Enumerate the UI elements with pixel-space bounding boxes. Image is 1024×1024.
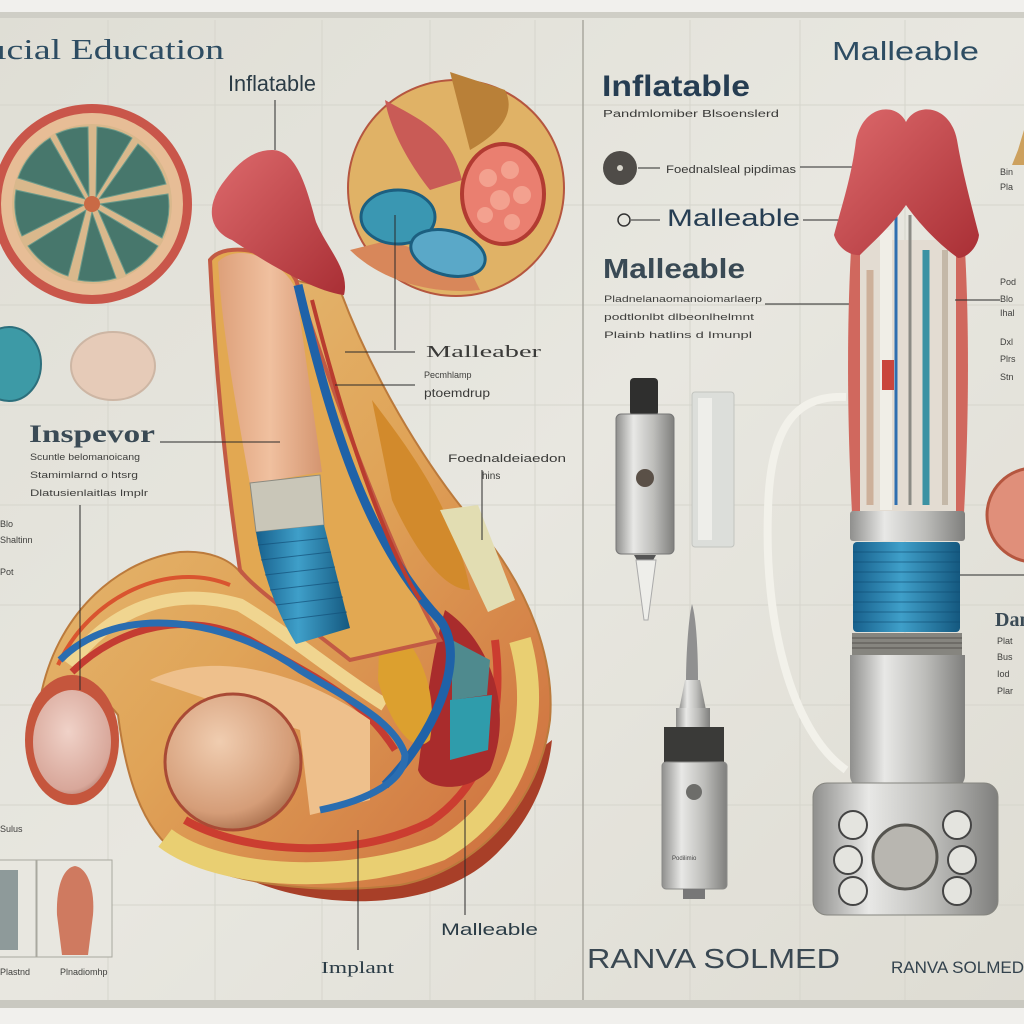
- blue vessels: [298, 285, 450, 785]
- callout: Inspevor: Inspevor: [29, 421, 155, 448]
- inner peach tissue: [150, 666, 370, 815]
- thumbnails: Sulus: [0, 824, 23, 834]
- right edge labels: Plat: [997, 636, 1013, 646]
- callout: Inspevor: Scuntle belomanoicang: [30, 452, 140, 462]
- title: ıcial Education: [0, 34, 225, 66]
- glans: [212, 150, 345, 295]
- callout: Inspevor: [29, 421, 280, 498]
- right edge labels: Bin: [1000, 167, 1013, 177]
- inset: anatomy circle: [348, 72, 564, 296]
- right edge labels: Iod: [997, 669, 1010, 679]
- label: Malleable bottom: Malleable: [441, 920, 538, 939]
- pointer lines: [80, 100, 465, 950]
- right edge labels: [955, 130, 1024, 696]
- thumbnails: Plnadiomhp: [60, 967, 108, 977]
- text block: Malleable: podtlonlbt dlbeonlhelmnt: [604, 312, 755, 322]
- right edge labels: Ihal: [1000, 308, 1015, 318]
- label: Implant: Implant: [321, 958, 394, 977]
- device: pen injector: [662, 604, 727, 899]
- label: Malleaber: [335, 342, 542, 400]
- callout: Foednaldeisedon: hins: [482, 471, 500, 482]
- right edge labels: Plrs: [1000, 354, 1016, 364]
- left capsule: [25, 675, 119, 805]
- icon: edge circle: [987, 468, 1024, 562]
- thumbnails: Plastnd: [0, 967, 30, 977]
- right edge labels: Pod: [1000, 277, 1016, 287]
- right edge labels: Dxl: [1000, 337, 1013, 347]
- implant coil: [256, 525, 350, 644]
- legend: Malleable: [618, 205, 860, 232]
- implant collar: [250, 475, 324, 532]
- icon: teal disc: [0, 327, 41, 401]
- gold structures: [378, 620, 432, 745]
- shaft: [210, 250, 440, 660]
- red tip: [834, 109, 979, 258]
- side label: left fragments: Pot: [0, 567, 14, 577]
- callout: Foednaldeisedon: Foednaldeiaedon: [448, 453, 566, 465]
- right edge labels: Pla: [1000, 182, 1013, 192]
- device: tube: [768, 397, 846, 770]
- red cavity: [418, 610, 500, 787]
- device: pen injector: Podilimio: [672, 856, 697, 862]
- text block: Malleable: Malleable: [603, 253, 745, 284]
- legend: Malleable: Malleable: [667, 205, 800, 232]
- lower body: [42, 262, 551, 889]
- device: implant: [834, 109, 979, 792]
- device: silver vial: [616, 378, 674, 620]
- device: clear sleeve: [692, 392, 734, 547]
- right edge labels: Plar: [997, 686, 1013, 696]
- collar: [850, 511, 965, 541]
- main capsule: [165, 694, 301, 830]
- anatomy illustration: [25, 150, 552, 901]
- outer bands: [58, 577, 230, 665]
- clear cylinder: [851, 240, 965, 512]
- legend: dark dot: [603, 151, 892, 185]
- label: Malleaber: Pecmhlamp: [424, 370, 472, 380]
- thumbnails: [0, 824, 112, 977]
- right edge labels: Stn: [1000, 372, 1014, 382]
- callout: Foednaldeisedon: [448, 453, 566, 540]
- legend: dark dot: Foednalsleal pipdimas: [666, 164, 797, 176]
- shadow under body: [250, 740, 552, 901]
- label: Malleaber: ptoemdrup: [424, 386, 490, 400]
- text block: Malleable: [603, 253, 855, 340]
- silver base: [850, 655, 965, 792]
- heading: Inflatable right: Inflatable: [602, 70, 750, 103]
- callout: Inspevor: Dlatusienlaitlas lmplr: [30, 488, 148, 498]
- right edge labels: Bus: [997, 652, 1013, 662]
- heading: Inflatable right: Pandmlomiber Blsoenslerd: [603, 109, 779, 120]
- callout: Inspevor: Stamimlarnd o htsrg: [30, 470, 138, 480]
- side label: left fragments: Shaltinn: [0, 535, 33, 545]
- heading: Inflatable right: [602, 70, 779, 120]
- heading: Malleable top right: Malleable: [832, 36, 979, 66]
- side label: left fragments: Blo: [0, 519, 13, 529]
- icon: beige capsule: [71, 332, 155, 400]
- footer label center: RANVA SOLMED: [587, 943, 840, 974]
- label: Malleaber: Malleaber: [426, 342, 542, 361]
- text block: Malleable: Pladnelanaomanoiomarlaerp: [604, 294, 762, 304]
- text block: Malleable: Plainb hatlins d Imunpl: [604, 330, 752, 340]
- heading: Inflatable left: Inflatable: [228, 71, 316, 96]
- side label: left fragments: [0, 519, 33, 577]
- icon: cross-section circle: [0, 104, 192, 304]
- silver ring: [852, 633, 962, 655]
- right edge labels: Blo: [1000, 294, 1013, 304]
- blue coil: [853, 542, 960, 632]
- footer label right: RANVA SOLMED: [891, 958, 1024, 977]
- device: control box: [813, 783, 998, 915]
